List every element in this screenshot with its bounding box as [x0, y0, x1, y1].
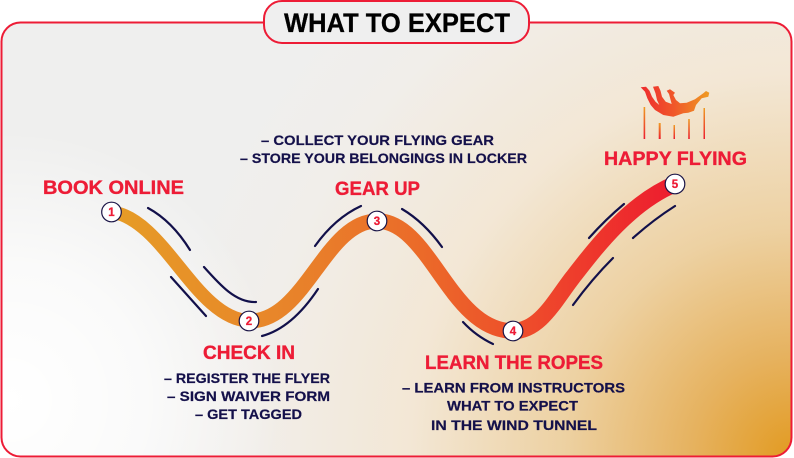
- marker 1: [102, 202, 121, 222]
- marker 2: 2: [246, 316, 252, 328]
- heading: gear up: GEAR UP: [335, 178, 420, 200]
- text block: gear up details: – STORE YOUR BELONGINGS IN LOCKER: [240, 150, 527, 166]
- heading: check in: CHECK IN: [203, 342, 295, 364]
- marker 5: [665, 174, 685, 194]
- chart: winding journey path: [112, 184, 675, 331]
- step 3: gear up: [240, 132, 527, 231]
- text block: gear up details: – COLLECT YOUR FLYING GEAR: [261, 132, 494, 148]
- heading: learn the ropes: LEARN THE ROPES: [425, 352, 603, 374]
- text block: learn the ropes details: IN THE WIND TUNNEL: [431, 417, 598, 433]
- title: [264, 1, 529, 43]
- text block: learn the ropes details: WHAT TO EXPECT: [447, 398, 578, 414]
- marker 2: [239, 311, 259, 331]
- step 1: book online: [43, 177, 184, 222]
- step 2: check in: [164, 311, 330, 422]
- heading: book online: BOOK ONLINE: [43, 177, 184, 199]
- icon: skydiver over wind bars: [641, 86, 709, 139]
- marker 5: 5: [672, 179, 679, 191]
- step 4: learn the ropes: [402, 321, 625, 433]
- text block: learn the ropes details: [402, 380, 625, 433]
- motion lines around the path: [148, 204, 675, 344]
- marker 4: [503, 321, 523, 341]
- text block: learn the ropes details: – LEARN FROM INSTRUCTORS: [402, 380, 625, 396]
- marker 1: 1: [108, 207, 115, 219]
- marker 4: 4: [510, 326, 517, 338]
- heading: happy flying: HAPPY FLYING: [604, 148, 747, 170]
- title: WHAT TO EXPECT: [284, 8, 510, 38]
- text block: gear up details: [240, 132, 527, 166]
- text block: check in details: – SIGN WAIVER FORM: [167, 388, 330, 404]
- text block: check in details: [164, 370, 330, 422]
- marker 3: [367, 211, 387, 231]
- text block: check in details: – GET TAGGED: [195, 406, 302, 422]
- marker 3: 3: [374, 216, 380, 228]
- step 5: happy flying: [604, 86, 747, 194]
- text block: check in details: – REGISTER THE FLYER: [164, 370, 330, 386]
